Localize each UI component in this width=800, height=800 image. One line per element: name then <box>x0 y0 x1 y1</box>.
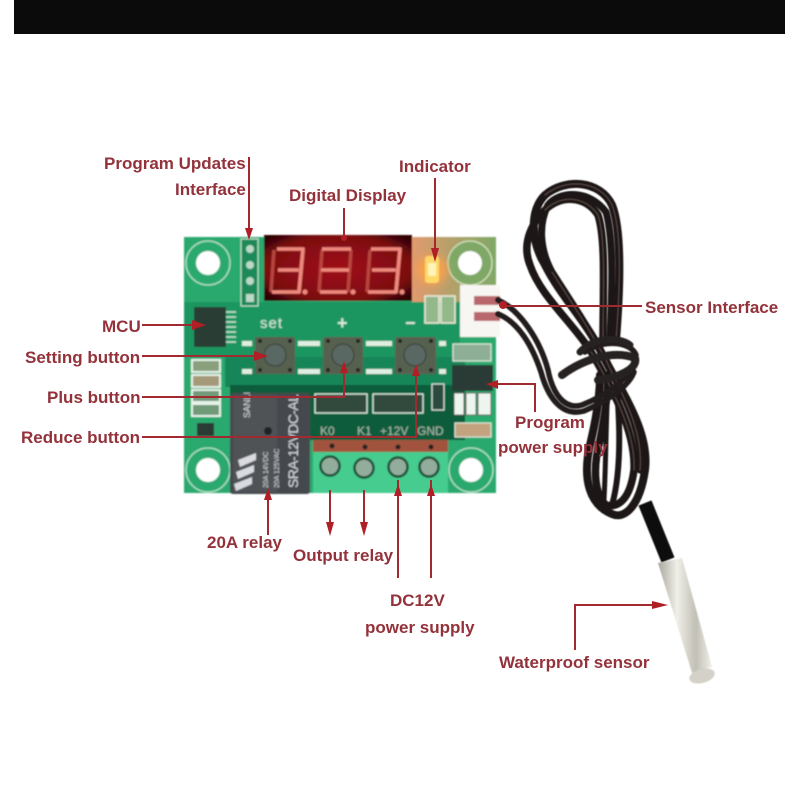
program header pins <box>241 239 258 306</box>
label: DC12V power supply <box>365 591 475 637</box>
circuit board photo <box>184 235 500 494</box>
label: program updates interface <box>104 154 246 199</box>
label: reduce button: Reduce button <box>21 428 140 447</box>
label: sensor interface: Sensor Interface <box>645 298 778 317</box>
indicator LED <box>417 255 447 285</box>
mounting hole: bottom left <box>186 448 230 492</box>
label: program power supply: Program <box>515 413 585 432</box>
label: setting button: Setting button <box>25 348 140 367</box>
label: MCU: MCU <box>102 317 141 336</box>
label: program power supply: power supply <box>498 438 608 457</box>
minus label: − <box>405 313 416 333</box>
connector leads <box>498 300 636 412</box>
reduce button <box>395 337 436 374</box>
red strip <box>313 440 448 452</box>
cable highlights <box>545 184 640 470</box>
label: program updates interface: Program Updates <box>104 154 246 173</box>
digital display <box>264 235 412 301</box>
regulator and right parts <box>432 344 493 437</box>
relay: 20A 125VAC <box>274 448 281 488</box>
terminal labels: GND <box>417 424 444 438</box>
small pads near indicator <box>425 296 455 323</box>
plus button <box>323 337 363 374</box>
button solder pads <box>242 341 446 374</box>
label: waterproof sensor: Waterproof sensor <box>499 653 650 672</box>
plus label: + <box>337 313 348 333</box>
cable bundle <box>527 184 646 515</box>
terminal labels <box>320 424 444 438</box>
metal sensor tip <box>658 558 716 686</box>
mounting hole: bottom right <box>449 448 493 492</box>
board base <box>184 237 496 493</box>
callout arrowheads <box>192 228 668 609</box>
resistors left column <box>192 360 220 416</box>
sensor lead <box>645 503 668 560</box>
diodes <box>315 394 423 413</box>
relay: SRA-12VDC-AL <box>285 394 301 488</box>
knot <box>562 340 635 380</box>
top black bar <box>14 0 785 34</box>
setting button <box>255 337 295 374</box>
terminal labels: +12V <box>380 424 408 438</box>
relay <box>230 392 310 494</box>
label: output relay: Output relay <box>293 546 394 565</box>
mounting hole: top right <box>448 241 492 285</box>
set label: set <box>260 315 283 332</box>
label: 20A relay: 20A relay <box>207 533 283 552</box>
callout leader lines <box>142 157 660 650</box>
relay: 20A 14VDC <box>263 451 270 488</box>
label: plus button: Plus button <box>47 388 140 407</box>
sensor connector <box>460 285 500 337</box>
mounting hole: top left <box>186 241 230 285</box>
sensor cable <box>498 184 668 560</box>
terminal labels: K0 <box>320 424 335 438</box>
relay: SANLI <box>242 392 252 418</box>
label: indicator: Indicator <box>399 157 471 176</box>
label: DC12V power supply: DC12V <box>390 591 445 610</box>
label: DC12V power supply: power supply <box>365 618 475 637</box>
label: digital display: Digital Display <box>289 186 407 205</box>
small transistor <box>197 423 214 436</box>
green terminal block <box>313 444 448 493</box>
label: program updates interface: Interface <box>175 180 246 199</box>
label: program power supply <box>498 413 608 457</box>
terminal labels: K1 <box>357 424 372 438</box>
MCU chip <box>194 307 236 347</box>
